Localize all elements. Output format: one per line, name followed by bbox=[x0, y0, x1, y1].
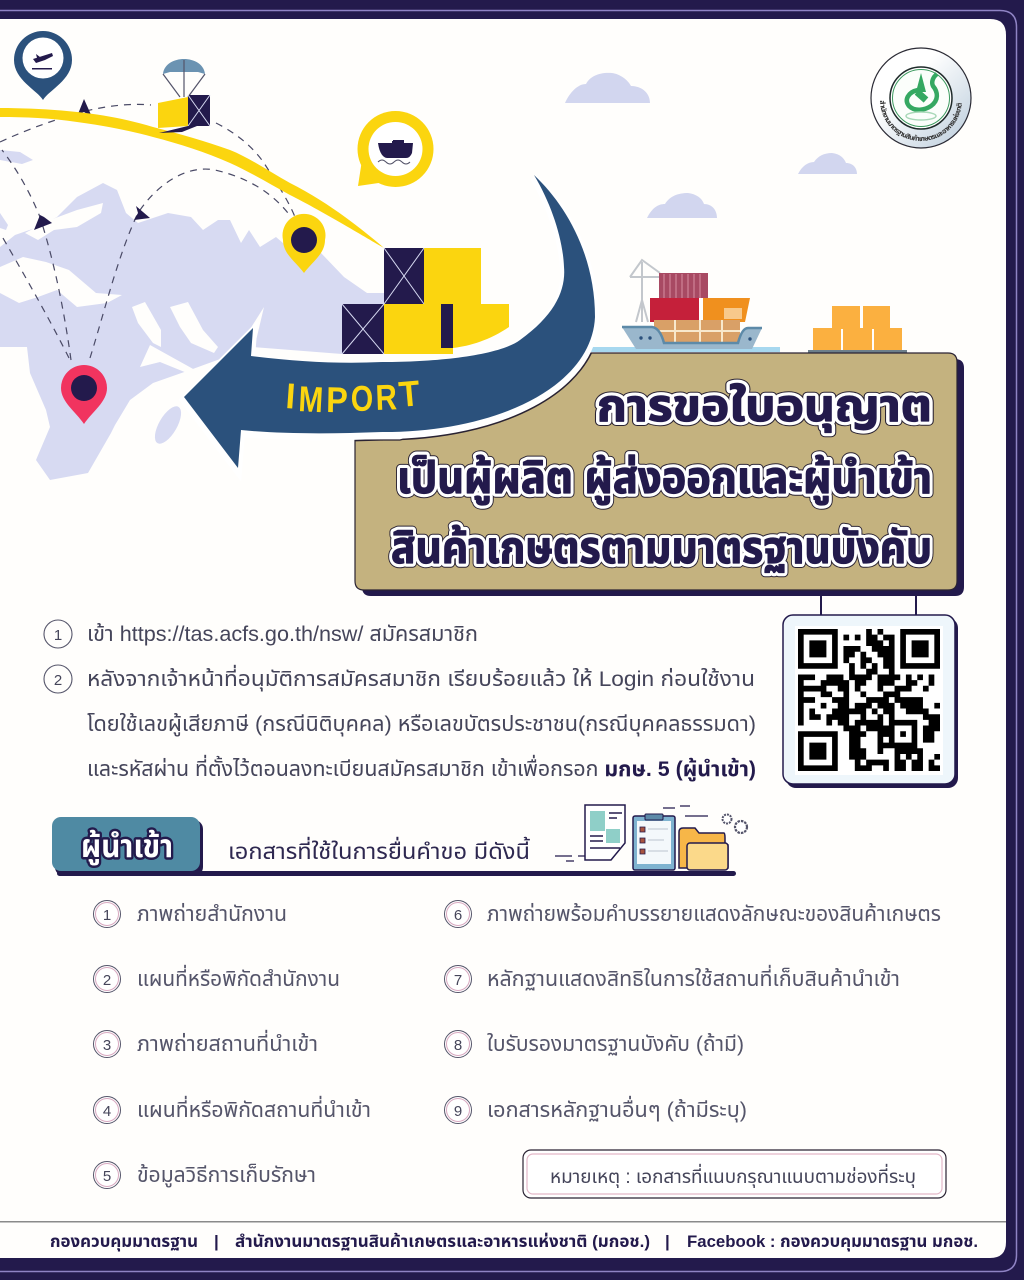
footer: | bbox=[214, 1232, 219, 1251]
clouds bbox=[565, 73, 857, 218]
title text: การขอใบอนุญาต bbox=[597, 382, 932, 433]
item 1: ภาพถ่ายสำนักงาน bbox=[137, 902, 287, 926]
item 4: แผนที่หรือพิกัดสถานที่นำเข้า bbox=[137, 1095, 371, 1122]
item 5: 5 bbox=[103, 1168, 111, 1185]
item 3: ภาพถ่ายสถานที่นำเข้า bbox=[137, 1029, 318, 1056]
footer: Facebook : กองควบคุมมาตรฐาน มกอช. bbox=[687, 1232, 978, 1252]
arrow label: P bbox=[326, 380, 348, 421]
arrow label bbox=[284, 373, 422, 421]
footer: กองควบคุมมาตรฐาน bbox=[50, 1232, 198, 1252]
stacked cargo boxes bbox=[342, 248, 509, 354]
title text bbox=[391, 382, 932, 573]
list: right column bbox=[444, 900, 941, 1124]
item 7: 7 bbox=[454, 972, 462, 989]
ship glyph bbox=[378, 141, 413, 158]
step 1: เข้า https://tas.acfs.go.th/nsw/ สมัครสมาชิก bbox=[87, 622, 478, 646]
map sea cutouts bbox=[0, 203, 264, 375]
orange parcels bbox=[808, 306, 907, 353]
callout: note bbox=[523, 1150, 946, 1198]
item 6: ภาพถ่ายพร้อมคำบรรยายแสดงลักษณะของสินค้าเกษตร bbox=[487, 902, 941, 926]
arrow label: R bbox=[375, 376, 398, 418]
footer bbox=[0, 1221, 1006, 1252]
item 9: 9 bbox=[454, 1103, 462, 1120]
item 8: ใบรับรองมาตรฐานบังคับ (ถ้ามี) bbox=[487, 1032, 744, 1056]
item 6: 6 bbox=[454, 907, 462, 924]
item 8: 8 bbox=[454, 1037, 462, 1054]
title text: สินค้าเกษตรตามมาตรฐานบังคับ bbox=[391, 524, 932, 573]
step 2 bbox=[44, 664, 756, 782]
title text: เป็นผู้ผลิต ผู้ส่งออกและผู้นำเข้า bbox=[397, 454, 932, 505]
step 2: 2 bbox=[54, 672, 62, 689]
ship illustration bbox=[590, 260, 780, 352]
item 3: 3 bbox=[103, 1037, 111, 1054]
footer: | bbox=[665, 1232, 670, 1251]
title text: การขอใบอนุญาต bbox=[597, 382, 932, 433]
pin: airplane bbox=[14, 31, 72, 100]
instructions bbox=[44, 620, 756, 782]
pin: yellow location bbox=[282, 214, 326, 273]
logo: ACFS seal: สำนักงานมาตรฐานสินค้าเกษตรและอาหารแห่งชาติ bbox=[880, 100, 962, 142]
clipboard bbox=[633, 816, 675, 870]
section heading: importer: ผู้นำเข้า bbox=[81, 828, 173, 865]
item 9 bbox=[444, 1095, 747, 1124]
section heading: importer bbox=[52, 817, 736, 876]
icon: documents and folder bbox=[555, 805, 747, 870]
arrow label: M bbox=[298, 378, 324, 420]
gears bbox=[722, 814, 732, 824]
world map bbox=[0, 150, 384, 480]
arrow label: O bbox=[350, 377, 374, 419]
item 2 bbox=[94, 964, 340, 992]
item 5 bbox=[94, 1162, 316, 1188]
panel: title board bbox=[355, 353, 964, 596]
document bbox=[585, 805, 625, 860]
step 2: หลังจากเจ้าหน้าที่อนุมัติการสมัครสมาชิก เรียบร้อยแล้ว ให้ Login ก่อนใช้งาน bbox=[87, 664, 755, 692]
yellow flight swoosh bbox=[0, 108, 384, 248]
list: left column bbox=[94, 900, 371, 1188]
section heading: importer: เอกสารที่ใช้ในการยื่นคำขอ มีดังนี้ bbox=[228, 836, 530, 864]
title text: เป็นผู้ผลิต ผู้ส่งออกและผู้นำเข้า bbox=[397, 454, 932, 505]
step 2: โดยใช้เลขผู้เสียภาษี (กรณีนิติบุคคล) หรือเลขบัตรประชาชน(กรณีบุคคลธรรมดา) bbox=[87, 712, 756, 737]
import arrow bbox=[184, 175, 595, 471]
pin: red destination bbox=[61, 365, 107, 424]
plane glyph bbox=[32, 53, 53, 70]
title text: สินค้าเกษตรตามมาตรฐานบังคับ bbox=[391, 524, 932, 573]
step 1: 1 bbox=[54, 627, 62, 644]
route arrowheads bbox=[34, 99, 150, 230]
logo: ACFS seal bbox=[870, 47, 972, 149]
item 3 bbox=[94, 1029, 318, 1058]
item 1: 1 bbox=[103, 907, 111, 924]
dashed flight routes bbox=[0, 104, 295, 360]
QR code sign bbox=[783, 596, 958, 788]
item 4 bbox=[94, 1095, 371, 1124]
item 4: 4 bbox=[103, 1103, 111, 1120]
arrow label: I bbox=[284, 376, 297, 417]
title text: เป็นผู้ผลิต ผู้ส่งออกและผู้นำเข้า bbox=[397, 454, 932, 505]
item 7: หลักฐานแสดงสิทธิในการใช้สถานที่เก็บสินค้านำเข้า bbox=[487, 964, 900, 991]
item 2: แผนที่หรือพิกัดสำนักงาน bbox=[137, 964, 340, 991]
item 5: ข้อมูลวิธีการเก็บรักษา bbox=[137, 1162, 316, 1188]
item 9: เอกสารหลักฐานอื่นๆ (ถ้ามีระบุ) bbox=[487, 1095, 747, 1123]
step 2: และรหัสผ่าน ที่ตั้งไว้ตอนลงทะเบียนสมัครสมาชิก เข้าเพื่อกรอก มกษ. 5 (ผู้นำเข้า) bbox=[87, 754, 756, 782]
folder bbox=[679, 828, 728, 868]
footer: สำนักงานมาตรฐานสินค้าเกษตรและอาหารแห่งชาติ (มกอช.) bbox=[235, 1231, 650, 1251]
item 1 bbox=[94, 900, 287, 928]
title text: การขอใบอนุญาต bbox=[597, 382, 932, 433]
arrow label: T bbox=[397, 373, 422, 415]
item 2: 2 bbox=[103, 972, 111, 989]
callout: note: หมายเหตุ : เอกสารที่แนบกรุณาแนบตามช่องที่ระบุ bbox=[550, 1163, 916, 1188]
parachute crate bbox=[158, 59, 210, 133]
title text: สินค้าเกษตรตามมาตรฐานบังคับ bbox=[391, 524, 932, 573]
pin: ship speech bubble bbox=[358, 111, 434, 187]
